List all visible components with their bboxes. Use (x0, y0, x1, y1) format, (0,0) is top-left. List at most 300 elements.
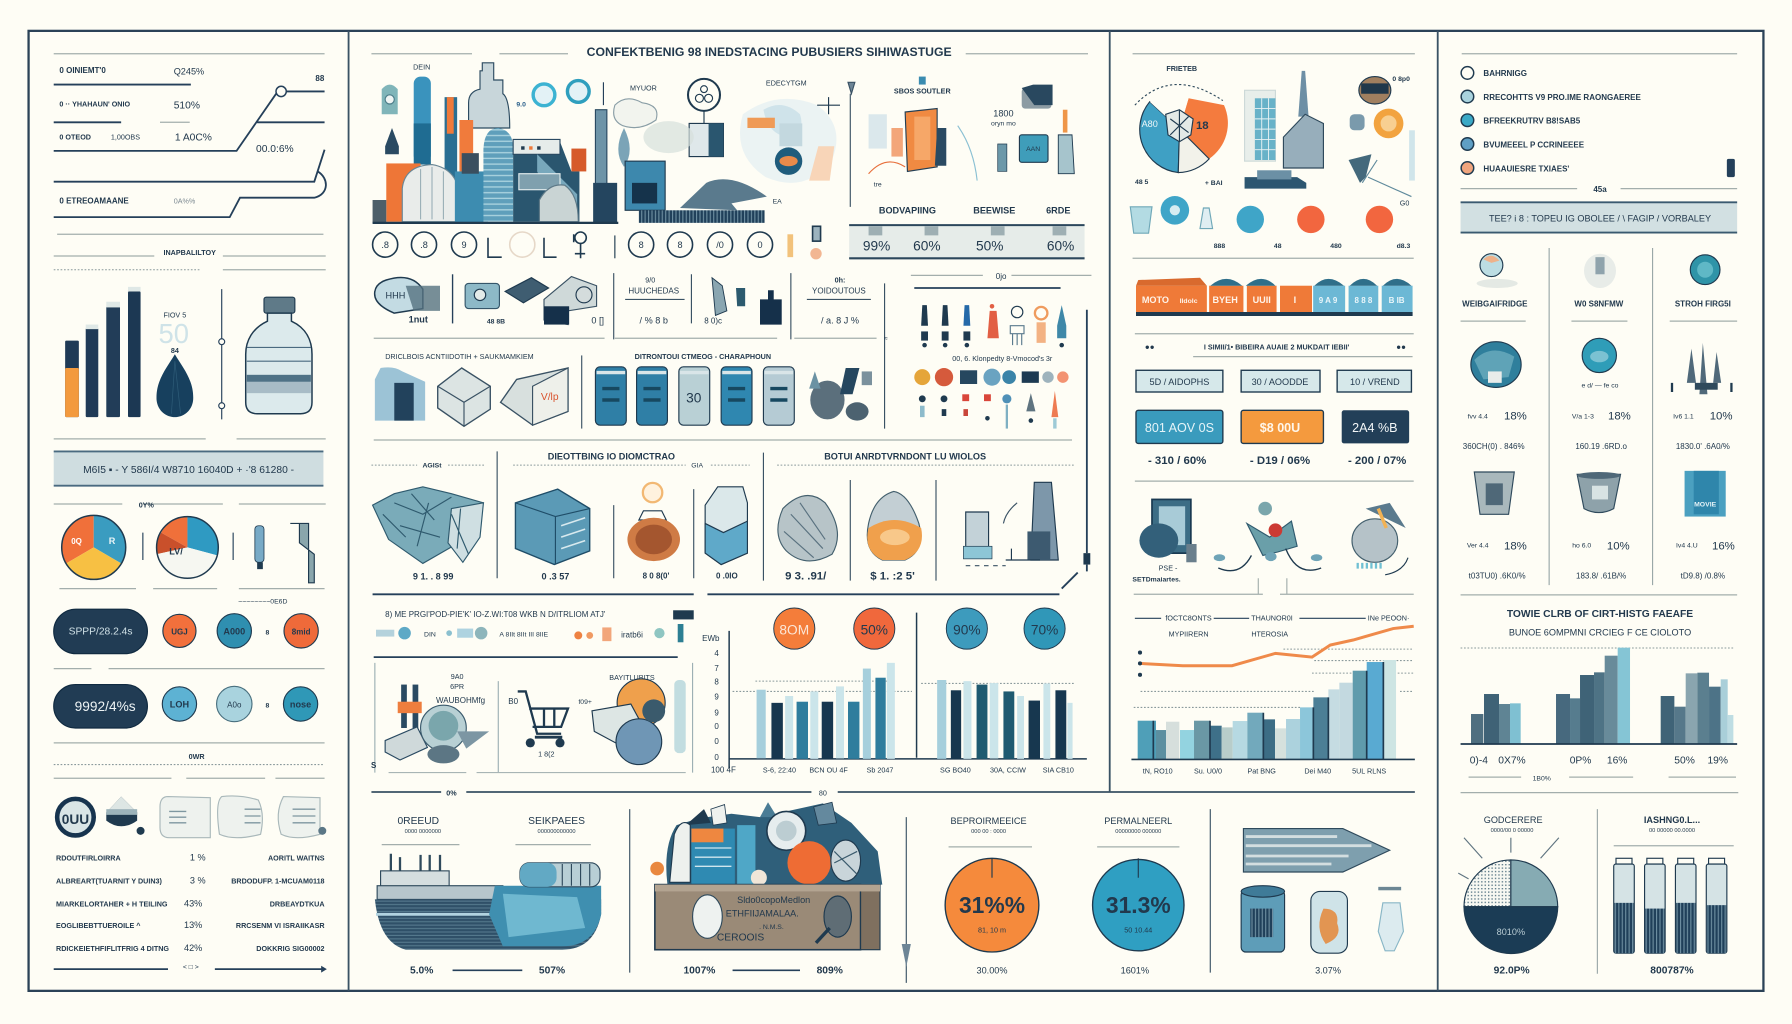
bar chart: centre with rate circles: 30A, CCIW (990, 766, 1026, 775)
pie with burst: 48 5 (1135, 179, 1149, 186)
stat: 50 with bag icon (156, 311, 193, 417)
pie chart: orange teal yellow (62, 515, 126, 579)
section: headings mid row: GIA (691, 462, 703, 469)
bar chart: small bars (65, 287, 141, 417)
icon grid row three: Ver 4.4 (1467, 542, 1489, 549)
bar chart: centre with rate circles: SIA CB10 (1043, 766, 1074, 775)
bar chart: centre with rate circles: 4 (714, 649, 719, 658)
table: left rows: AORITL WAITNS (268, 854, 325, 863)
panel: centre main (371, 45, 1091, 775)
row: processing icons: HHH (386, 290, 405, 300)
step lines chart: 0 ·· YHAHAUN' ONIO (59, 99, 130, 108)
section: packaging heading and icons (375, 352, 582, 429)
illustration: orange book group: oryn mo (991, 121, 1016, 128)
ship illustration: 000000000000 (538, 829, 576, 835)
step lines chart: 0 ETREOAMAANE (59, 196, 129, 205)
heading: left mid: INAPBALILTOY (163, 248, 216, 257)
labels: circle row: 8 (677, 240, 683, 250)
pill row one: ~~~~~~~~0E6D (238, 598, 287, 605)
icon grid row three: ho 6.0 (1572, 542, 1591, 549)
percent circle: teal (1093, 816, 1184, 976)
small circles row: 480 (1330, 243, 1342, 250)
icons: device, figure, apple (1132, 499, 1408, 584)
bar chart: centre with rate circles: S-6, 22:40 (763, 766, 796, 775)
illustration: pale cluster (740, 79, 840, 183)
bar chart: right: 0P% (1570, 755, 1591, 766)
legend list: BAHRNIGG (1483, 69, 1527, 78)
legend list: 45a (1593, 185, 1607, 194)
block: huuchedas: HUUCHEDAS (628, 287, 679, 296)
table: left rows: EOGLIBEBTTUEROILE ^ (56, 921, 141, 930)
heading: chart: BUNOE 6OMPMNI CRCIEG F CE CIOLOTO (1509, 627, 1691, 637)
block: yoidoutous: YOIDOUTOUS (812, 287, 866, 296)
heading: chart: TOWIE CLRB OF CIRT-HISTG FAEAFE (1507, 609, 1693, 620)
icon grid row one: W0 S8NFMW (1574, 299, 1624, 308)
legend strip: iratb6i (621, 631, 643, 640)
block: huuchedas: / % 8 b (640, 315, 668, 325)
block: crane, cart, orb: S (371, 761, 377, 770)
segmented label strip: 8 8 8 (1355, 296, 1373, 305)
sub heading: second column: ●● (1396, 343, 1406, 352)
icons: device, figure, apple: PSE - (1159, 563, 1178, 572)
small bottles row (911, 272, 1091, 589)
icon grid row two: V/a 1-3 (1572, 413, 1594, 420)
segmented label strip: B IB (1389, 296, 1405, 305)
icons: containers: 3.07% (1315, 966, 1341, 976)
labels: material values: 8 0 8(0' (643, 571, 669, 580)
percent circle: orange: 81, 10 m (978, 926, 1006, 935)
stats strip: 99% 60% 50% 60%: BODVAPIING (879, 206, 936, 216)
filled tags: 2A4 %B (1352, 421, 1398, 435)
line and bar chart: fOCTC8ONTS (1165, 614, 1212, 623)
panel: bottom strip (375, 788, 1403, 983)
line and bar chart: INe PEOON· (1368, 614, 1409, 623)
legend strip (376, 610, 694, 642)
stats strip: 99% 60% 50% 60%: 60% (1047, 238, 1074, 253)
icons: small tools (255, 523, 314, 583)
table: left rows: DOKKRIG SIG00002 (256, 944, 325, 953)
illustration: orange book group: AAN (1026, 146, 1040, 153)
icon row: materials (373, 482, 1090, 566)
title: CONFEKTBENIG 98 INEDSTACING PUBUSIERS SIHIWASTUGE (587, 45, 952, 59)
icon grid row two: 18% (1504, 410, 1527, 422)
table: left rows: RRCSENM VI ISRAIIKASR (236, 921, 325, 930)
percent ranges: - 310 / 60% (1148, 455, 1206, 467)
icons: device, figure, apple: SETDmaiartes. (1132, 577, 1181, 584)
segmented label strip: BYEH (1212, 295, 1238, 305)
labels: circle row: 9 (461, 240, 467, 250)
filled tags (1136, 410, 1409, 443)
rate circle: teal: 90% (953, 622, 981, 637)
panel: right column (1458, 54, 1738, 977)
step lines chart (54, 66, 326, 217)
table: left rows: 13% (184, 920, 202, 930)
icon grid row two: Iv6 1.1 (1673, 413, 1694, 420)
legend strip: DIN (424, 632, 436, 639)
building illustration: G0 (1400, 199, 1409, 208)
section: blue jars: DITRONTOUI CTMEOG - CHARAPHOUN (635, 352, 771, 361)
rate circle: orange (774, 608, 815, 649)
rate circle: red-orange (854, 608, 895, 649)
icon grid row three: Iv4 4.U (1676, 542, 1698, 549)
icon grid row three: 183.8/ .61B/% (1576, 571, 1626, 580)
icon caption: 00, 6. Klonpedty 8-Vmocod's 3r (952, 354, 1053, 363)
segmented label strip: I (1294, 295, 1296, 305)
waste box illustration: CEROOIS (717, 933, 764, 944)
icons: containers (1241, 886, 1403, 976)
icon: rocks (809, 368, 872, 421)
legend strip: 8) ME PRGI'POD-PIE'K' IO-Z.WI:T08 WKB N D/ITRLIOM ATJ' (385, 610, 606, 619)
pie chart: quartered: 92.0P% (1494, 966, 1530, 977)
block: crane, cart, orb: WAUBOHMfg (436, 696, 485, 705)
pie chart: quartered: GODCERERE (1484, 815, 1543, 825)
step lines chart: 0 OTEOD (59, 132, 91, 141)
waste box illustration: Sldo0copoMedlon (737, 895, 810, 905)
labels: material values: 0 .3 57 (541, 571, 569, 581)
table: left rows: RDOUTFIRLOIRRA (56, 854, 121, 863)
block: crane, cart, orb: B0 (508, 697, 519, 706)
circle icon row (373, 226, 822, 259)
icon grid row three: 10% (1607, 541, 1630, 553)
icon grid row one: WEIBGAIFRIDGE (1462, 299, 1528, 308)
small circles row: 48 (1274, 243, 1282, 250)
pie with burst: A80 (1142, 119, 1158, 129)
percent circle: teal: 1601% (1121, 966, 1149, 976)
small bottles row: 0jo (996, 272, 1007, 281)
percent circle: orange: 000 00 : 0000 (971, 829, 1006, 835)
icon grid row three: t03TU0) .6K0/% (1469, 571, 1526, 580)
ship illustration: SEIKPAEES (528, 816, 585, 827)
icon grid row two: e d/ — fe co (1582, 382, 1619, 389)
pie chart: quartered: 0000/00 0 00000 (1491, 828, 1533, 834)
stats strip: 99% 60% 50% 60%: 60% (913, 238, 941, 253)
tubes: 800787% (1650, 966, 1694, 977)
step lines chart: 88 (315, 74, 325, 83)
icons: capsule row (57, 796, 326, 838)
step lines chart: 1 A0C% (175, 133, 212, 144)
icon grid row three: MOVIE (1694, 501, 1717, 508)
bar chart: centre with rate circles: 7 (714, 664, 719, 673)
sub heading: second column: ●● (1145, 343, 1155, 352)
icon grid row one (1462, 254, 1731, 308)
icon grid row two: 360CH(0) . 846% (1463, 442, 1525, 451)
band heading (1461, 202, 1737, 233)
row: processing icons (375, 274, 604, 325)
line and bar chart: Dei M40 (1304, 767, 1331, 776)
bar chart: right: 0X7% (1498, 755, 1526, 766)
section: headings mid row: DIEOTTBING IO DIOMCTRAO (548, 451, 675, 461)
line and bar chart: MYPIIRERN (1169, 630, 1209, 639)
bar chart: centre with rate circles: 9 (714, 692, 719, 701)
line and bar chart: tN, RO10 (1143, 767, 1173, 776)
labels: circle row: 8 (639, 240, 644, 250)
pill row two (54, 685, 318, 728)
labels: circle row: /0 (716, 240, 724, 250)
section: headings mid row: AGISt (422, 462, 442, 469)
bar chart: centre with rate circles: 100 4F (711, 766, 736, 775)
pie with burst: + BAI (1205, 180, 1223, 187)
icon: water bottle (219, 289, 312, 419)
tubes (1614, 815, 1734, 977)
bar chart: centre with rate circles: SG BO40 (940, 766, 971, 775)
band: left data strip: M6I5 ▪ - Y 586I/4 W8710 16040D + ·'8 61280 - (83, 465, 294, 476)
stats strip: 99% 60% 50% 60%: 99% (863, 238, 890, 253)
pie with burst (1135, 64, 1228, 187)
rate circle: red-orange: 50% (861, 622, 888, 637)
icon grid row three: tD9.8) /0.8% (1681, 571, 1725, 580)
box values: 1007% (683, 966, 715, 977)
table: left rows: RDICKEIETHFIFLITFRIG 4 DITNG (56, 944, 169, 953)
arrow footer: left: < □ > (183, 964, 199, 971)
labels: material values: 9 3. .91/ (785, 570, 827, 582)
arrow footer: left (54, 964, 327, 973)
label: 0y%: 0Y% (139, 500, 154, 509)
ship illustration: 0REEUD (397, 816, 439, 827)
icon grid row three (1467, 471, 1735, 580)
ship values (410, 966, 565, 977)
segmented label strip: IIdolc (1180, 298, 1198, 305)
section: packaging heading and icons: V/lp (541, 392, 559, 403)
pill row one (54, 598, 318, 654)
icon grid row one: STROH FIRG5I (1675, 299, 1731, 308)
block: crane, cart, orb (371, 663, 693, 773)
table: left rows: 1 % (190, 853, 206, 863)
ship values: 5.0% (410, 966, 433, 977)
pill row two: A0o (227, 700, 242, 709)
outlined tags: 30 / AOODDE (1252, 377, 1308, 387)
pie chart: second (143, 517, 233, 580)
bar chart: right: 50% (1674, 755, 1695, 766)
ship illustration: 0000 0000000 (405, 829, 441, 835)
tubes: 00 00000 00.0000 (1649, 828, 1695, 834)
pie chart: quartered: 8010% (1497, 927, 1525, 937)
illustration: orange book group: tre (874, 181, 882, 188)
percent circle: teal: 50 10.44 (1124, 926, 1152, 935)
segmented label strip (1136, 278, 1413, 316)
bar chart: right (1461, 648, 1737, 783)
pie with burst: 18 (1196, 120, 1209, 132)
waste box illustration: . N.M.S. (759, 924, 784, 931)
bar chart: centre with rate circles: BCN OU 4F (809, 766, 848, 775)
row: processing icons: 1nut (409, 314, 428, 324)
step lines chart: 0A%% (174, 196, 196, 205)
stat: 50 with bag icon: 50 (158, 318, 189, 349)
rate circle: orange: 8OM (779, 622, 809, 637)
pill row two: LOH (170, 699, 189, 709)
percent circle: orange: BEPROIRMEEICE (951, 816, 1027, 826)
labels: material values (413, 570, 915, 582)
rate circle: teal two (1024, 608, 1065, 649)
percent ranges: - D19 / 06% (1250, 455, 1310, 467)
step lines chart: 510% (174, 101, 200, 112)
pill row two: 8 (266, 702, 270, 709)
icon grid row two: fvv 4.4 (1468, 413, 1488, 420)
icon grid row two: 10% (1710, 410, 1733, 422)
sub heading: second column: I SIMII/1• BIBEIRA AUAIE 2 MUKDAIT IEBII' (1204, 343, 1350, 352)
bar chart: centre with rate circles (702, 608, 1087, 775)
ship illustration (375, 816, 601, 950)
icon grid row two (1463, 338, 1733, 451)
block: huuchedas: 8 0)c (704, 316, 722, 325)
stats strip: 99% 60% 50% 60%: 50% (976, 238, 1003, 253)
legend list: RRECOHTTS V9 PRO.IME RAONGAEREE (1483, 93, 1641, 102)
illustration: orange book group: 1800 (993, 109, 1014, 119)
stat: 50 with bag icon: FIOV 5 (163, 311, 186, 320)
section: headings mid row (371, 451, 1074, 581)
icons: capsule row: 0UU (62, 812, 89, 827)
line and bar chart: THAUNOR0I (1251, 614, 1293, 623)
pie chart: quartered (1458, 815, 1559, 977)
tubes: IASHNG0.L... (1644, 815, 1700, 825)
ship values: 507% (539, 966, 565, 977)
stats strip: 99% 60% 50% 60%: 6RDE (1046, 206, 1070, 216)
illustration: processing machine: EA (773, 198, 782, 205)
illustration: factory and containers (373, 63, 618, 224)
block: yoidoutous: 0h: (835, 275, 845, 284)
table: left rows: BRDODUFP. 1-MCUAM0118 (231, 876, 325, 885)
pill row one: A000 (223, 626, 245, 636)
segmented label strip: 9 A 9 (1319, 296, 1338, 305)
labels: material values: $ 1. :2 5' (870, 570, 915, 582)
icon grid row two: 1830.0' .6A0/% (1676, 442, 1730, 451)
block: crane, cart, orb: f09+ (578, 699, 592, 706)
bar chart: right: 16% (1607, 755, 1627, 766)
bar chart: centre with rate circles: Sb 2047 (867, 766, 893, 775)
segmented label strip: MOTO (1142, 295, 1169, 305)
filled tags: 801 AOV 0S (1145, 421, 1214, 435)
illustration: processing machine: MYUOR (630, 83, 657, 92)
block: crane, cart, orb: 1 8(2 (538, 750, 554, 759)
bar chart: right: 0)-4 (1470, 755, 1488, 766)
section: blue jars: 30 (686, 390, 702, 405)
table: left rows: 43% (184, 898, 202, 908)
illustration: factory and containers: 9.0 (516, 101, 526, 108)
icon grid row three: 16% (1712, 541, 1735, 553)
labels: circle row (381, 240, 763, 250)
outlined tags: 5D / AIDOPHS (1150, 377, 1209, 387)
pie chart: second: LV/ (169, 546, 183, 556)
illustration: pale cluster: EDECYTGM (766, 79, 807, 88)
building illustration: 0 8p0 (1392, 76, 1410, 83)
box values: 809% (817, 966, 843, 977)
step lines chart: 00.0:6% (256, 144, 294, 155)
legend list: HUAAUIESRE TXIAES' (1483, 164, 1569, 173)
pill row one: 8 (266, 629, 270, 636)
row: processing icons: 48 8B (487, 318, 505, 325)
labels: material values: 0 .0IO (716, 571, 738, 580)
block: yoidoutous: / a. 8 J % (821, 315, 859, 325)
illustration: factory and containers: DEIN (413, 63, 430, 72)
pie with burst: FRIETEB (1166, 64, 1197, 73)
block: yoidoutous (791, 273, 888, 429)
block: huuchedas: 9/0 (645, 275, 655, 284)
table: left rows: ALBREART(TUARNIT Y DUIN3) (56, 876, 163, 885)
table: left rows: MIARKELORTAHER + H TEILING (56, 899, 168, 908)
small circles row: d8.3 (1397, 243, 1410, 250)
stats strip: 99% 60% 50% 60% (849, 206, 1085, 258)
small circles row: 888 (1214, 243, 1225, 250)
row: processing icons: 0 [] (591, 315, 604, 325)
labels: material values: 9 1. . 8 99 (413, 571, 453, 581)
illustration: processing machine (603, 79, 782, 223)
building illustration (1245, 71, 1415, 208)
panel: bottom strip: 0% (446, 788, 457, 797)
rate circle: teal (946, 608, 987, 649)
icon grid row two: 18% (1608, 410, 1631, 422)
section: blue jars (595, 352, 794, 425)
bar chart: centre with rate circles: EWb (702, 634, 720, 643)
line and bar chart: 5UL RLNS (1352, 767, 1386, 776)
pill row one: SPPP/28.2.4s (69, 626, 133, 637)
bar chart: centre with rate circles: 0 (714, 737, 719, 746)
step lines chart: Q245% (174, 66, 204, 76)
labels: circle row: .8 (420, 240, 428, 250)
line and bar chart: Su. U0/0 (1194, 767, 1222, 776)
line and bar chart (1131, 578, 1415, 776)
table: left rows: 42% (184, 943, 202, 953)
bar chart: centre with rate circles: 0 (714, 722, 719, 731)
stats strip: 99% 60% 50% 60%: BEEWISE (973, 206, 1015, 216)
heading: chart (1507, 609, 1693, 637)
pill row two: 9992/4%s (75, 699, 136, 714)
waste box illustration: ETHFIIJAMALAA. (726, 909, 799, 919)
block: crane, cart, orb: 9A0 (451, 672, 464, 681)
percent circle: teal: PERMALNEERL (1104, 816, 1172, 826)
pie chart: orange teal yellow: 0Q (71, 537, 82, 546)
band: left data strip (54, 451, 323, 486)
section: packaging heading and icons: DRICLBOIS ACNTIIDOTIH + SAUKMAMKIEM (385, 352, 534, 361)
icon grid row two: 160.19 .6RD.o (1575, 442, 1627, 451)
table: left rows: 3 % (190, 875, 206, 885)
percent circle: orange: 31%% (959, 892, 1025, 918)
percent circle: teal: 00000000 000000 (1115, 829, 1161, 835)
box values (683, 966, 843, 977)
bar chart: centre with rate circles: 8 (714, 678, 719, 687)
block: crane, cart, orb: 6PR (450, 682, 464, 691)
legend list: BVUMEEEL P CCRINEEEE (1483, 140, 1585, 149)
pill row two: nose (290, 699, 311, 709)
percent circle: teal: 31.3% (1106, 892, 1171, 918)
sub heading: second column (1145, 343, 1413, 357)
waste box illustration (650, 802, 882, 950)
segmented label strip: UUII (1253, 295, 1271, 305)
step lines chart: 1,00OBS (111, 132, 140, 141)
table: left rows (56, 853, 325, 953)
block: yoidoutous: ≈ (884, 336, 888, 343)
bar chart: centre with rate circles: 9 (714, 708, 719, 717)
percent ranges: - 200 / 07% (1348, 455, 1406, 467)
labels: circle row: 0 (757, 240, 763, 250)
outlined tags: 10 / VREND (1350, 377, 1400, 387)
illustration: orange book group: SBOS SOUTLER (894, 87, 951, 96)
step lines chart: 0 OINIEMT'0 (59, 66, 106, 75)
labels: circle row: .8 (381, 240, 389, 250)
line and bar chart: HTEROSIA (1251, 630, 1288, 639)
illustration: orange book group (848, 77, 1074, 207)
legend list (1461, 67, 1735, 194)
small circles row (1130, 196, 1410, 250)
legend list: BFREEKRUTRV B8!SAB5 (1483, 116, 1581, 125)
arrow: striped pointer (1243, 829, 1390, 872)
pill row one: 8mid (292, 627, 311, 636)
outlined tags (1136, 370, 1411, 392)
bar chart: centre with rate circles: 0 (714, 753, 719, 762)
icon grid row three: 18% (1504, 541, 1527, 553)
arrow: down (902, 817, 911, 983)
percent circle: orange: 30.00% (977, 966, 1007, 976)
pill row one: UGJ (171, 627, 188, 636)
pie chart: orange teal yellow: R (109, 536, 116, 546)
